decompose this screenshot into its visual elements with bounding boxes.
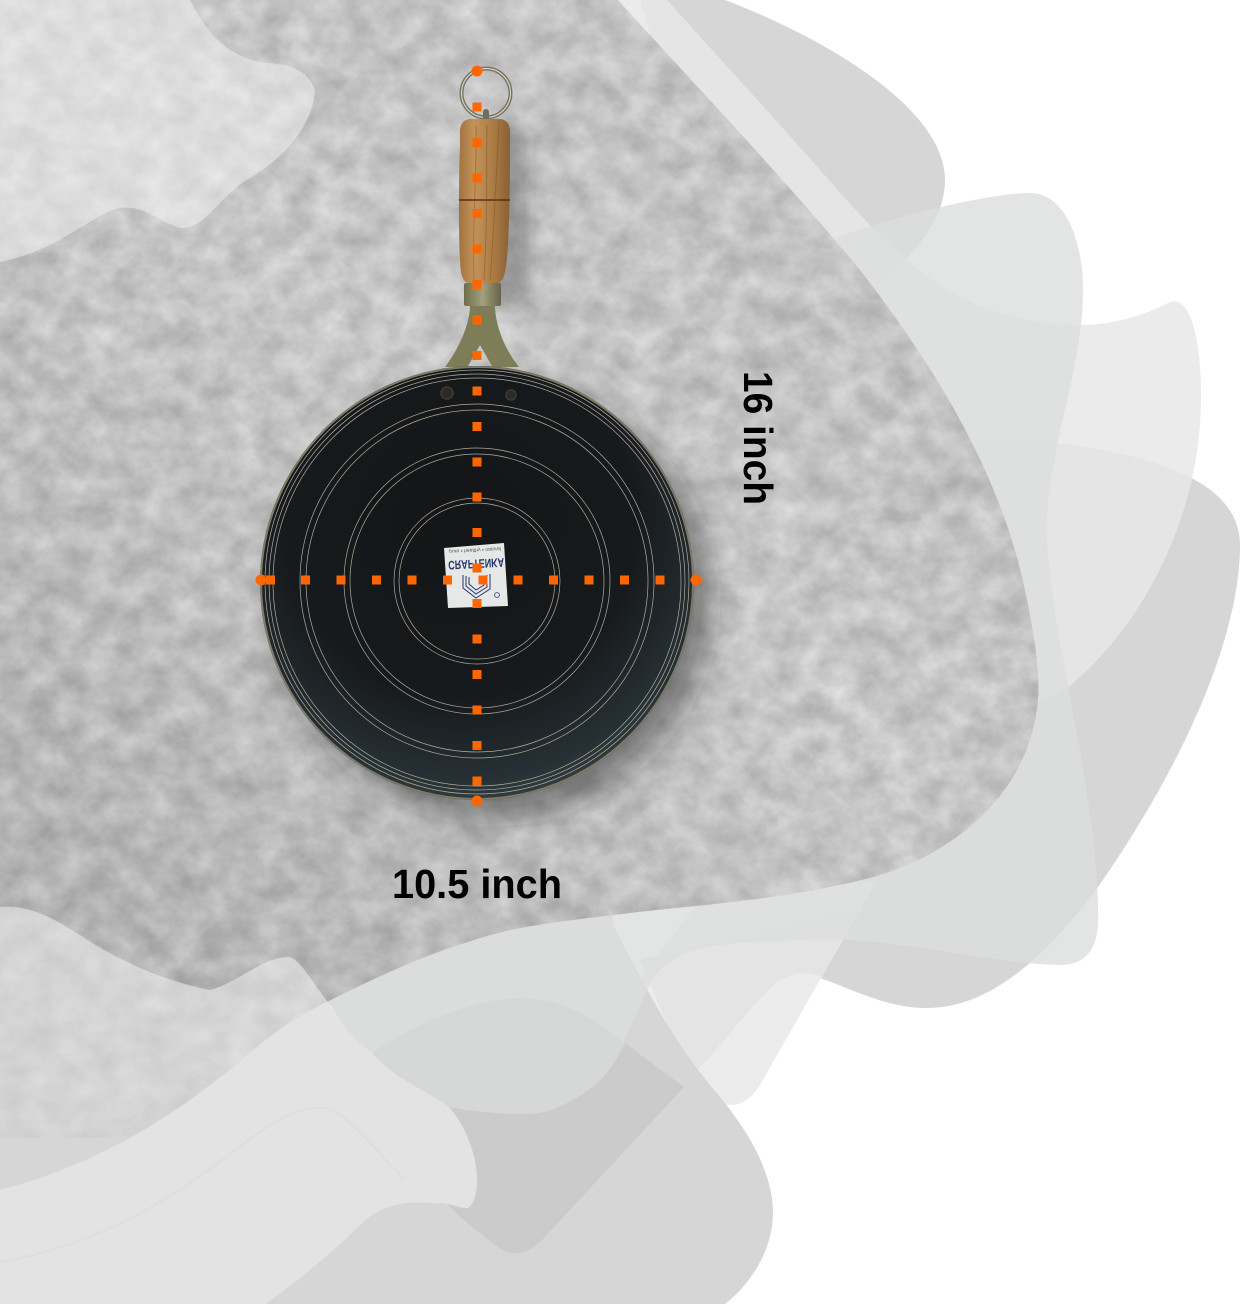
wave: light band shape [610,0,1201,720]
brand sticker [444,543,508,608]
wave: top-left light blob [0,0,315,262]
panel: textured concrete background [0,0,1060,1140]
wave: top dark lobe [640,0,945,300]
pan body [260,366,694,800]
registered mark [495,593,499,597]
dimension line: width [256,574,702,586]
wave: bottom middle light shape [640,905,860,1078]
metal collar [464,283,501,306]
wave: right dark shape [760,430,1240,1008]
dimension line: height [472,66,482,806]
wave: bottom-left light blob [0,907,477,1208]
handle shadow [478,125,528,305]
wave: bottom large dark shape [0,900,773,1304]
metal bracket [445,305,519,367]
wave: dark peak under central shape [372,998,625,1114]
label: width: 10.5 inch [392,861,562,907]
engraved rings [265,370,689,794]
wave: bottom-left inner fold [0,1108,405,1262]
wave: left patch below texture [0,1138,190,1190]
wave: large central translucent shape [0,193,1098,1262]
pan shadow [278,384,710,816]
wood grip [459,119,510,283]
label: height: 16 inch [735,371,781,505]
wave: bottom lighter diagonal shape [600,880,877,1105]
rivets [441,387,453,399]
wave: bottom-left pale shape [0,1002,477,1304]
wave: dark overlap diamond [440,1043,684,1253]
logo mark [463,574,490,598]
tagline: pure • healthy • natural [449,545,501,554]
icon: hanging ring [462,68,510,121]
brand name: CRAFTENKA [448,555,504,572]
pan handle: bracket and wood [445,119,519,367]
